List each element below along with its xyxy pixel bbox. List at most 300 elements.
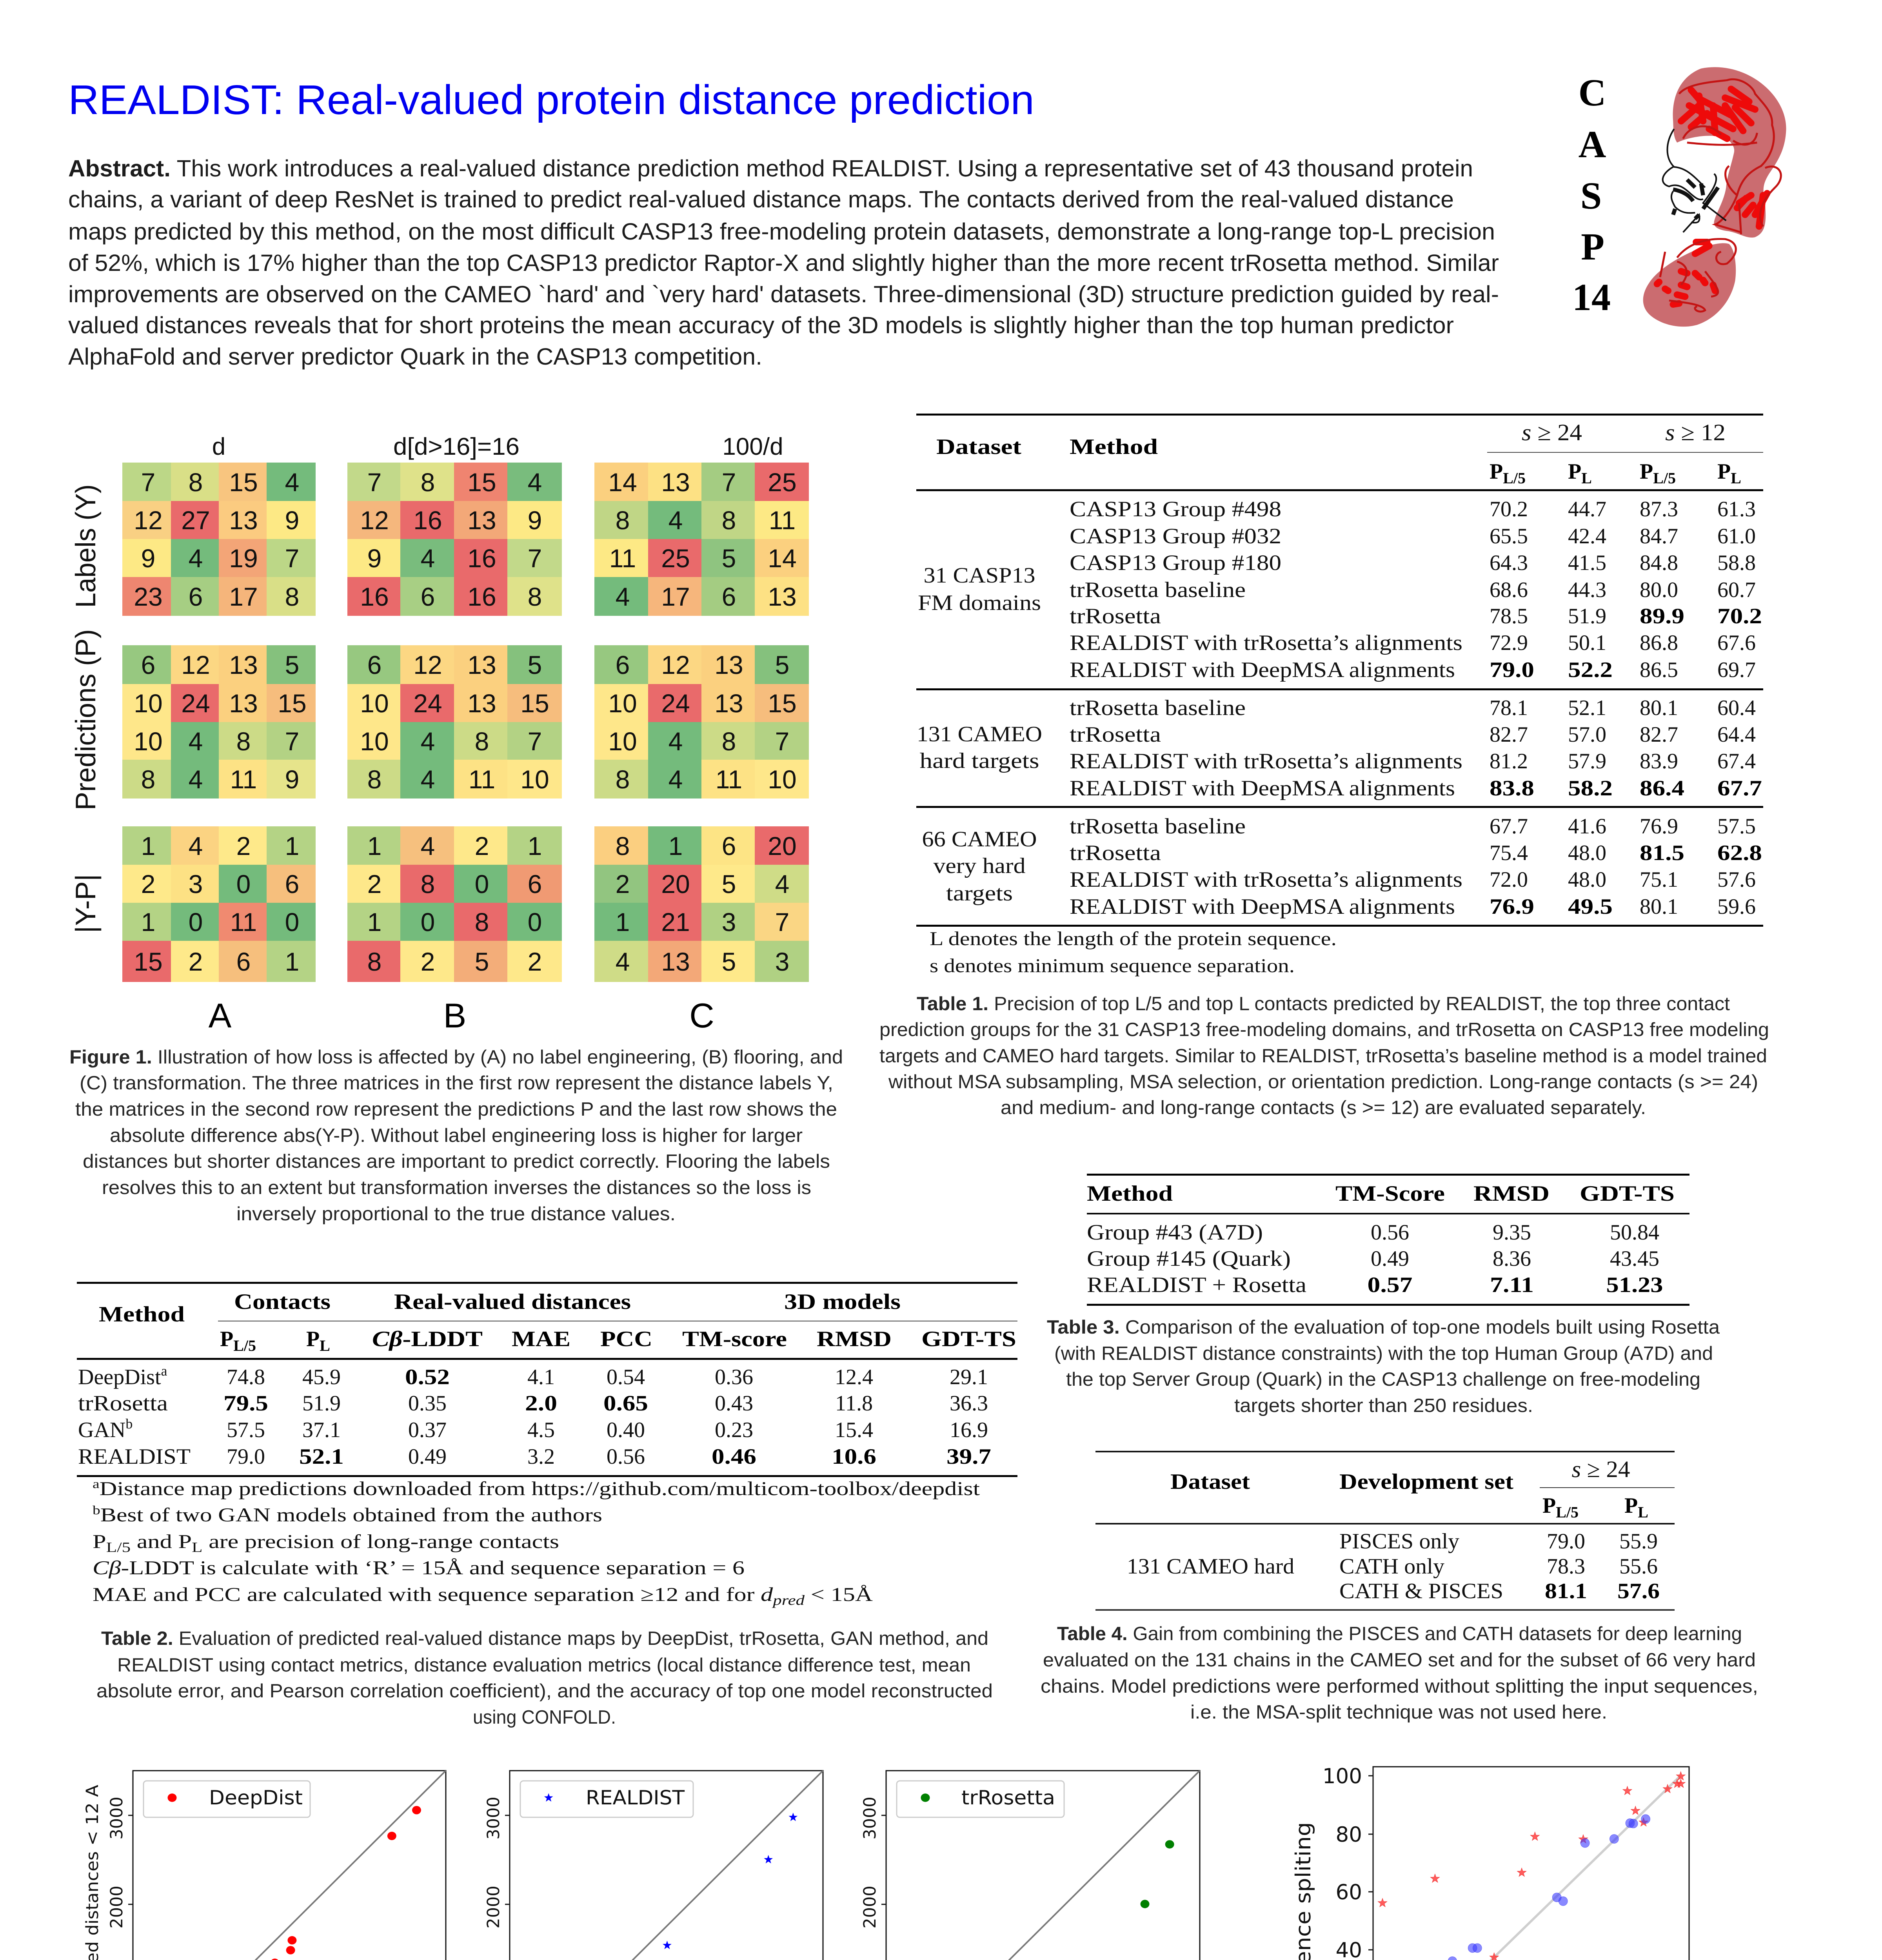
table 1 values: 52.1 [1568, 696, 1606, 720]
table 1 values: 70.2 [1717, 604, 1762, 628]
logo letters: P [1581, 226, 1604, 268]
table 1 values: 81.2 [1490, 749, 1528, 773]
caption: Table 2: REALDIST using contact metrics, distance evaluation metrics (local distance difference test, mean [117, 1655, 971, 1676]
caption: Table 3: Table 3. Comparison of the evaluation of top-one models built using Rosetta [1047, 1317, 1720, 1338]
matrix: A difference: 4 [189, 831, 203, 860]
table 1 values: 86.4 [1640, 776, 1684, 800]
matrix: A labels: 12 [134, 506, 163, 535]
table 1 values: 61.3 [1717, 497, 1756, 521]
table 4 header: P [1624, 1494, 1638, 1518]
table 2 rows: 39.7 [946, 1445, 991, 1469]
table 1 values: 52.2 [1568, 658, 1613, 682]
matrix: C labels [594, 463, 809, 616]
table 2 footnotes: are precision of long-range contacts [203, 1530, 559, 1552]
table 1 values: 82.7 [1640, 722, 1678, 747]
table 4 rows: 79.0 [1547, 1529, 1585, 1553]
table 1 values: 57.5 [1717, 814, 1756, 838]
table 2 rows: 52.1 [299, 1445, 344, 1469]
matrix: B difference: 8 [421, 869, 435, 898]
table 1 dataset column: FM domains [918, 591, 1041, 615]
abstract text block: chains, a variant of deep ResNet is trained to predict real-valued distance maps. The contacts derived from the real-valued distance [68, 186, 1454, 212]
matrix: A labels: 9 [285, 506, 299, 535]
table 1 values: 51.9 [1568, 604, 1606, 628]
table 1 values: 75.4 [1490, 841, 1528, 865]
table 1 values: 80.1 [1640, 696, 1678, 720]
matrix: B labels: 16 [467, 544, 496, 573]
matrix: B predictions: 10 [360, 727, 389, 756]
axes labels: 80 [1336, 1823, 1362, 1847]
matrix: C predictions: 10 [608, 689, 637, 718]
matrix: C difference: 5 [722, 869, 736, 898]
chart: Figure 2 trRosetta scatter [860, 1771, 1200, 1960]
matrix: C labels: 11 [609, 544, 636, 573]
table 2 rows: 79.5 [223, 1391, 268, 1416]
table 1 values: 80.0 [1640, 578, 1678, 602]
table 1 dataset column: very hard [933, 854, 1026, 878]
table 1 method column: REALDIST with DeepMSA alignments [1070, 895, 1455, 919]
caption: Table 4: evaluated on the 131 chains in the CAMEO set and for the subset of 66 very hard [1043, 1650, 1756, 1671]
table 1 values: 89.9 [1640, 604, 1684, 628]
column letters A B C: B [443, 996, 466, 1035]
table 2 header: Cβ-LDDT [372, 1327, 483, 1351]
table 2 rows: 15.4 [835, 1418, 873, 1442]
matrix: C labels: 14 [608, 468, 637, 497]
table 2 rows: 0.46 [712, 1445, 756, 1469]
table 4 header: P [1542, 1494, 1556, 1518]
table 2 rows: DeepDist [78, 1365, 161, 1389]
table 2 header: TM-score [682, 1327, 787, 1351]
matrix: A difference: 0 [236, 869, 251, 898]
table 1 dataset column: 131 CAMEO [917, 722, 1042, 746]
table 4 header: Dataset [1170, 1470, 1250, 1494]
table 2 rows: GAN [78, 1418, 125, 1442]
table 2 rows: 36.3 [950, 1391, 988, 1416]
matrix: C predictions: 8 [722, 727, 736, 756]
chart: Figure 2 DeepDist scatter [83, 1771, 446, 1960]
table 1 values: 78.1 [1490, 696, 1528, 720]
axes labels [83, 1784, 424, 1960]
table 2 header: PCC [600, 1327, 652, 1351]
table 1 method column: CASP13 Group #032 [1070, 524, 1281, 548]
matrix: C predictions: 15 [768, 689, 797, 718]
matrix: B predictions: 10 [520, 765, 549, 794]
table 2 footnotes: b [93, 1503, 100, 1517]
matrix: A difference: 6 [236, 947, 251, 976]
table 2 rows: 0.54 [607, 1365, 645, 1389]
table 2 footnotes [93, 1477, 980, 1608]
axes labels: 2000 [107, 1886, 127, 1929]
matrix: B difference [347, 826, 562, 982]
matrix: C labels: 5 [722, 544, 736, 573]
table 1 values: 64.4 [1717, 722, 1756, 747]
table 1 header: L [1581, 469, 1592, 487]
matrix: B difference: 1 [367, 907, 381, 936]
table 2 header: P [306, 1327, 320, 1351]
matrix: A predictions: 4 [189, 727, 203, 756]
matrix: B labels: 9 [528, 506, 542, 535]
matrix: C labels: 8 [722, 506, 736, 535]
table 2 header [99, 1290, 1016, 1354]
matrix: A labels: 4 [189, 544, 203, 573]
table 2 rows: 10.6 [832, 1445, 876, 1469]
table 2 rows: trRosetta [78, 1391, 168, 1416]
matrix: B difference: 8 [475, 907, 489, 936]
table 1 values: 84.7 [1640, 524, 1678, 548]
matrix: A difference: 0 [285, 907, 299, 936]
table 2 rows: 0.52 [405, 1365, 450, 1389]
table 1 values: 87.3 [1640, 497, 1678, 521]
table 2 rows: 2.0 [525, 1391, 557, 1416]
caption: Table 1: and medium- and long-range contacts (s >= 12) are evaluated separately. [1001, 1097, 1646, 1118]
matrix: B predictions: 5 [528, 650, 542, 679]
matrix: A difference: 1 [285, 831, 299, 860]
table 1 values: 57.0 [1568, 722, 1606, 747]
table 1 values: 67.6 [1717, 631, 1756, 655]
panel: Figure 1 heatmaps [70, 433, 809, 1035]
table 3 rows: 0.49 [1371, 1247, 1409, 1271]
table 2 footnotes: P [93, 1530, 104, 1552]
abstract text block: improvements are observed on the CAMEO `hard' and `very hard' datasets. Three-dimensional (3D) structure prediction guided by real- [68, 281, 1499, 307]
table 1 header: Method [1070, 435, 1158, 459]
matrix: A difference: 0 [189, 907, 203, 936]
matrix: A predictions: 4 [189, 765, 203, 794]
table 2 rows: 0.49 [408, 1445, 447, 1469]
matrix: A labels: 17 [229, 582, 258, 611]
table 1 method column: trRosetta [1070, 722, 1161, 747]
table 1 values: 42.4 [1568, 524, 1606, 548]
caption: Table 4: chains. Model predictions were performed without splitting the input sequences, [1041, 1676, 1758, 1697]
table 1 [916, 414, 1763, 976]
matrix: B labels: 16 [413, 506, 442, 535]
table 1 values: 67.7 [1717, 776, 1762, 800]
caption: Figure 1: distances but shorter distances are important to predict correctly. Flooring the labels [83, 1151, 830, 1172]
matrix: C difference [594, 826, 809, 982]
matrix: A predictions: 13 [229, 689, 258, 718]
table 1 values: 84.8 [1640, 551, 1678, 575]
table 2 footnotes: Cβ -LDDT is calculate with ‘R’ = 15Å and sequence separation = 6 [93, 1557, 745, 1579]
table 1 method column: trRosetta baseline [1070, 814, 1246, 838]
matrix: B predictions: 8 [367, 765, 381, 794]
matrix: B difference: 2 [528, 947, 542, 976]
column titles: 100/d [722, 433, 783, 460]
matrix: B difference: 2 [421, 947, 435, 976]
table 2 rows [78, 1363, 991, 1469]
matrix: C predictions: 7 [775, 727, 789, 756]
table 2 footnotes: a [93, 1477, 100, 1491]
matrix: B difference: 2 [367, 869, 381, 898]
matrix: C labels: 11 [769, 506, 796, 535]
column letters A B C [209, 996, 714, 1035]
table 1 values: 64.3 [1490, 551, 1528, 575]
column letters A B C: C [689, 996, 714, 1035]
matrix: B labels: 7 [528, 544, 542, 573]
matrix: B difference: 8 [367, 947, 381, 976]
matrix: A labels [122, 463, 316, 616]
caption: Figure 1: Figure 1. Illustration of how loss is affected by (A) no label engineering, (B) flooring, and [69, 1047, 843, 1068]
matrix: C labels: 4 [616, 582, 630, 611]
caption: Figure 1: (C) transformation. The three matrices in the first row represent the distance labels Y, [80, 1073, 833, 1094]
matrix: B predictions: 4 [421, 727, 435, 756]
matrix: A labels: 9 [141, 544, 155, 573]
caption: Table 2: using CONFOLD. [473, 1707, 616, 1728]
logo letters: A [1579, 123, 1606, 166]
table 3 rows: Group #145 (Quark) [1087, 1247, 1291, 1271]
table 4 rows: CATH only [1339, 1554, 1444, 1579]
matrix: B difference: 0 [528, 907, 542, 936]
matrix: C difference: 7 [775, 907, 789, 936]
matrix: B difference: 6 [528, 869, 542, 898]
matrix: A labels: 8 [285, 582, 299, 611]
protein structure blobs [1643, 67, 1786, 327]
table 1 values: 83.9 [1640, 749, 1678, 773]
matrix: C difference: 4 [775, 869, 789, 898]
legend: REALDIST [520, 1781, 693, 1817]
logo letters: 14 [1572, 276, 1611, 319]
table 3 rows: REALDIST + Rosetta [1087, 1273, 1306, 1297]
table 2 rows: REALDIST [78, 1445, 191, 1469]
table 1 method column: CASP13 Group #498 [1070, 497, 1281, 521]
table 2 rows: 0.37 [408, 1418, 447, 1442]
table 1 header: L [1731, 469, 1741, 487]
table 2 rows: 0.43 [715, 1391, 753, 1416]
table 2 header: Contacts [234, 1290, 331, 1314]
table 1 values: 82.7 [1490, 722, 1528, 747]
axes labels: 3000 [484, 1797, 503, 1840]
table 3 header: Method [1087, 1181, 1173, 1206]
matrix: C predictions: 10 [768, 765, 797, 794]
matrix: C labels: 13 [768, 582, 797, 611]
matrix: B predictions: 10 [360, 689, 389, 718]
table 1 method column: REALDIST with DeepMSA alignments [1070, 658, 1455, 682]
table 2 rows: 45.9 [302, 1365, 341, 1389]
matrix: C predictions: 5 [775, 650, 789, 679]
matrix: A difference: 2 [236, 831, 251, 860]
legend: REALDIST: REALDIST [586, 1786, 685, 1809]
matrix: B labels: 9 [367, 544, 381, 573]
matrix: B labels: 16 [467, 582, 496, 611]
matrix: B difference: 1 [367, 831, 381, 860]
table 1 values: 81.5 [1640, 841, 1684, 865]
table 2 footnotes: Distance map predictions downloaded from https://github.com/multicom-toolbox/deepdist [100, 1477, 980, 1499]
caption: Table 3: (with REALDIST distance constraints) with the top Human Group (A7D) and [1054, 1343, 1713, 1364]
matrix: C difference: 3 [722, 907, 736, 936]
column titles [212, 433, 783, 460]
trRosetta data points [899, 1840, 1174, 1960]
table 1 values: 78.5 [1490, 604, 1528, 628]
table 1 values: 44.3 [1568, 578, 1606, 602]
matrix: B predictions: 12 [413, 650, 442, 679]
caption: Table 3 [1047, 1317, 1720, 1416]
matrix: A labels: 27 [181, 506, 210, 535]
table 2 header: GDT-TS [921, 1327, 1016, 1351]
table 2 rows: 0.35 [408, 1391, 447, 1416]
table 1 dataset column: 66 CAMEO [922, 827, 1037, 851]
table 1 method column: trRosetta [1070, 604, 1161, 628]
table 1 values: 59.6 [1717, 895, 1756, 919]
matrix: B predictions: 13 [467, 689, 496, 718]
table 1 values: 48.0 [1568, 841, 1606, 865]
REALDIST data points [522, 1813, 797, 1960]
column titles: d [212, 433, 225, 460]
matrix: C predictions: 11 [716, 765, 742, 794]
matrix: C difference: 8 [616, 831, 630, 860]
table 3 rows: 8.36 [1493, 1247, 1531, 1271]
logo letters [1572, 72, 1611, 319]
matrix: A labels: 7 [141, 468, 155, 497]
axes labels [484, 1797, 801, 1960]
table 1 footnotes [930, 927, 1337, 976]
matrix: C labels: 25 [768, 468, 797, 497]
table 2 rows: 29.1 [950, 1365, 988, 1389]
matrix: A predictions: 10 [134, 727, 163, 756]
table 1 values: 48.0 [1568, 867, 1606, 892]
matrix: A difference: 11 [230, 907, 257, 936]
matrix: C predictions: 8 [616, 765, 630, 794]
table 1 values: 69.7 [1717, 658, 1756, 682]
table 1 values: 70.2 [1490, 497, 1528, 521]
table 1 values: 49.5 [1568, 895, 1613, 919]
table 4 rows: PISCES only [1339, 1529, 1459, 1553]
table 3 rows: 50.84 [1610, 1220, 1659, 1245]
table 2 footnotes: MAE and PCC are calculated with sequence separation ≥12 and for d [93, 1583, 770, 1605]
table 1 values: 68.6 [1490, 578, 1528, 602]
matrix: C labels: 7 [722, 468, 736, 497]
table 4 rows: 81.1 [1545, 1579, 1587, 1603]
matrix: C difference: 1 [669, 831, 683, 860]
table 1 header: P [1717, 459, 1731, 484]
matrix: A labels: 15 [229, 468, 258, 497]
matrix: B labels: 6 [421, 582, 435, 611]
table 3 header: GDT-TS [1580, 1181, 1675, 1206]
matrix: B labels: 12 [360, 506, 389, 535]
table 2 rows: 4.1 [527, 1365, 555, 1389]
table 2 header: P [220, 1327, 233, 1351]
table 1 values: 86.8 [1640, 631, 1678, 655]
table 1 values: 57.6 [1717, 867, 1756, 892]
caption: Figure 1: absolute difference abs(Y-P). Without label engineering loss is higher for larger [110, 1125, 803, 1146]
matrix: A labels: 23 [134, 582, 163, 611]
table 2 footnotes: L [192, 1539, 203, 1555]
table 2 rows: 12.4 [835, 1365, 873, 1389]
table 3 header [1087, 1181, 1675, 1206]
matrix: B predictions: 6 [367, 650, 381, 679]
table 4 rows [1127, 1529, 1660, 1603]
table 1 values: 67.7 [1490, 814, 1528, 838]
logo letters: S [1580, 175, 1602, 217]
caption: Figure 1: resolves this to an extent but transformation inverses the distances so the loss is [102, 1177, 811, 1198]
table 2 rows: 0.65 [603, 1391, 648, 1416]
table 3 rows: 51.23 [1606, 1273, 1663, 1297]
table 4 rows: 55.6 [1619, 1554, 1658, 1579]
table 2 header: 3D models [784, 1290, 901, 1314]
axes labels: 100 [1322, 1764, 1362, 1788]
table 1 values: 58.2 [1568, 776, 1613, 800]
table 4 header [1170, 1456, 1648, 1521]
table 2 rows: 0.23 [715, 1418, 753, 1442]
table 2 rows: a [161, 1363, 167, 1379]
table 1 header: Dataset [936, 435, 1021, 459]
table 1 method column [1070, 497, 1462, 919]
table 1 method column: trRosetta [1070, 841, 1161, 865]
caption: Table 2: Table 2. Evaluation of predicted real-valued distance maps by DeepDist, trRosetta, GAN method, and [101, 1628, 988, 1649]
table 1 method column: REALDIST with trRosetta’s alignments [1070, 749, 1462, 773]
table 2 header: Real-valued distances [394, 1290, 631, 1314]
matrix: C labels: 6 [722, 582, 736, 611]
caption: Table 2: absolute error, and Pearson correlation coefficient), and the accuracy of top one model reconstructed [96, 1681, 993, 1702]
legend: trRosetta: trRosetta [961, 1786, 1055, 1809]
table 2 header: L [320, 1337, 330, 1354]
table 2 footnotes: < 15Å [805, 1583, 873, 1605]
table 1 method column: REALDIST with DeepMSA alignments [1070, 776, 1455, 800]
matrix: A difference: 2 [141, 869, 155, 898]
table 4 [1095, 1451, 1675, 1611]
table 1 values: 86.5 [1640, 658, 1678, 682]
table 3 header: RMSD [1473, 1181, 1550, 1206]
matrix: C difference: 5 [722, 947, 736, 976]
matrix: A predictions: 5 [285, 650, 299, 679]
matrix: B predictions: 13 [467, 650, 496, 679]
table 2 header: L/5 [233, 1337, 256, 1354]
matrix: C predictions: 24 [661, 689, 690, 718]
abstract text block: AlphaFold and server predictor Quark in the CASP13 competition. [68, 343, 762, 370]
matrix: A difference: 3 [189, 869, 203, 898]
matrix: A predictions: 8 [236, 727, 251, 756]
table 2 [77, 1282, 1017, 1608]
matrix: A predictions: 11 [230, 765, 257, 794]
abstract text block: maps predicted by this method, on the most difficult CASP13 free-modeling protein datasets, demonstrate a long-range top-L precision [68, 218, 1495, 245]
caption: Table 3: the top Server Group (Quark) in the CASP13 challenge on free-modeling [1066, 1369, 1700, 1390]
matrix: C difference: 1 [616, 907, 630, 936]
matrix: B labels: 15 [467, 468, 496, 497]
column titles: d[d>16]=16 [393, 433, 520, 460]
matrix: B predictions: 15 [520, 689, 549, 718]
table 1 dataset column [917, 563, 1042, 906]
matrix: A predictions: 13 [229, 650, 258, 679]
row titles: Predictions (P) [70, 629, 102, 810]
table 1 values: 57.9 [1568, 749, 1606, 773]
table 2 rows: 74.8 [227, 1365, 265, 1389]
matrix: A predictions: 8 [141, 765, 155, 794]
table 1 values: 41.6 [1568, 814, 1606, 838]
table 1 dataset column: targets [946, 881, 1013, 906]
matrix: B labels: 4 [421, 544, 435, 573]
caption: Table 1 [879, 993, 1769, 1118]
table 1 values [1490, 497, 1762, 919]
table 4 rows: CATH & PISCES [1339, 1579, 1503, 1603]
matrix: A labels: 13 [229, 506, 258, 535]
caption: Table 1: targets and CAMEO hard targets. Similar to REALDIST, trRosetta’s baseline method is a model trained [879, 1045, 1767, 1067]
matrix: A predictions: 24 [181, 689, 210, 718]
logo: CASP 14 [1572, 67, 1786, 327]
matrix: A difference: 1 [285, 947, 299, 976]
matrix: A difference: 15 [134, 947, 163, 976]
table 2 rows: 0.56 [607, 1445, 645, 1469]
matrix: A labels: 8 [189, 468, 203, 497]
table 3 rows [1087, 1220, 1663, 1297]
matrix: B labels: 7 [367, 468, 381, 497]
matrix: B labels [347, 463, 562, 616]
table 1 values: 41.5 [1568, 551, 1606, 575]
table 1 method column: trRosetta baseline [1070, 696, 1246, 720]
table 1 header: L/5 [1653, 469, 1676, 487]
matrix: B predictions: 8 [475, 727, 489, 756]
table 2 rows: 0.36 [715, 1365, 753, 1389]
table 4 header: L/5 [1556, 1503, 1579, 1521]
matrix: A difference [122, 826, 316, 982]
table 4 rows: 131 CAMEO hard [1127, 1554, 1294, 1579]
matrix: B labels: 8 [528, 582, 542, 611]
matrix: C predictions: 6 [616, 650, 630, 679]
